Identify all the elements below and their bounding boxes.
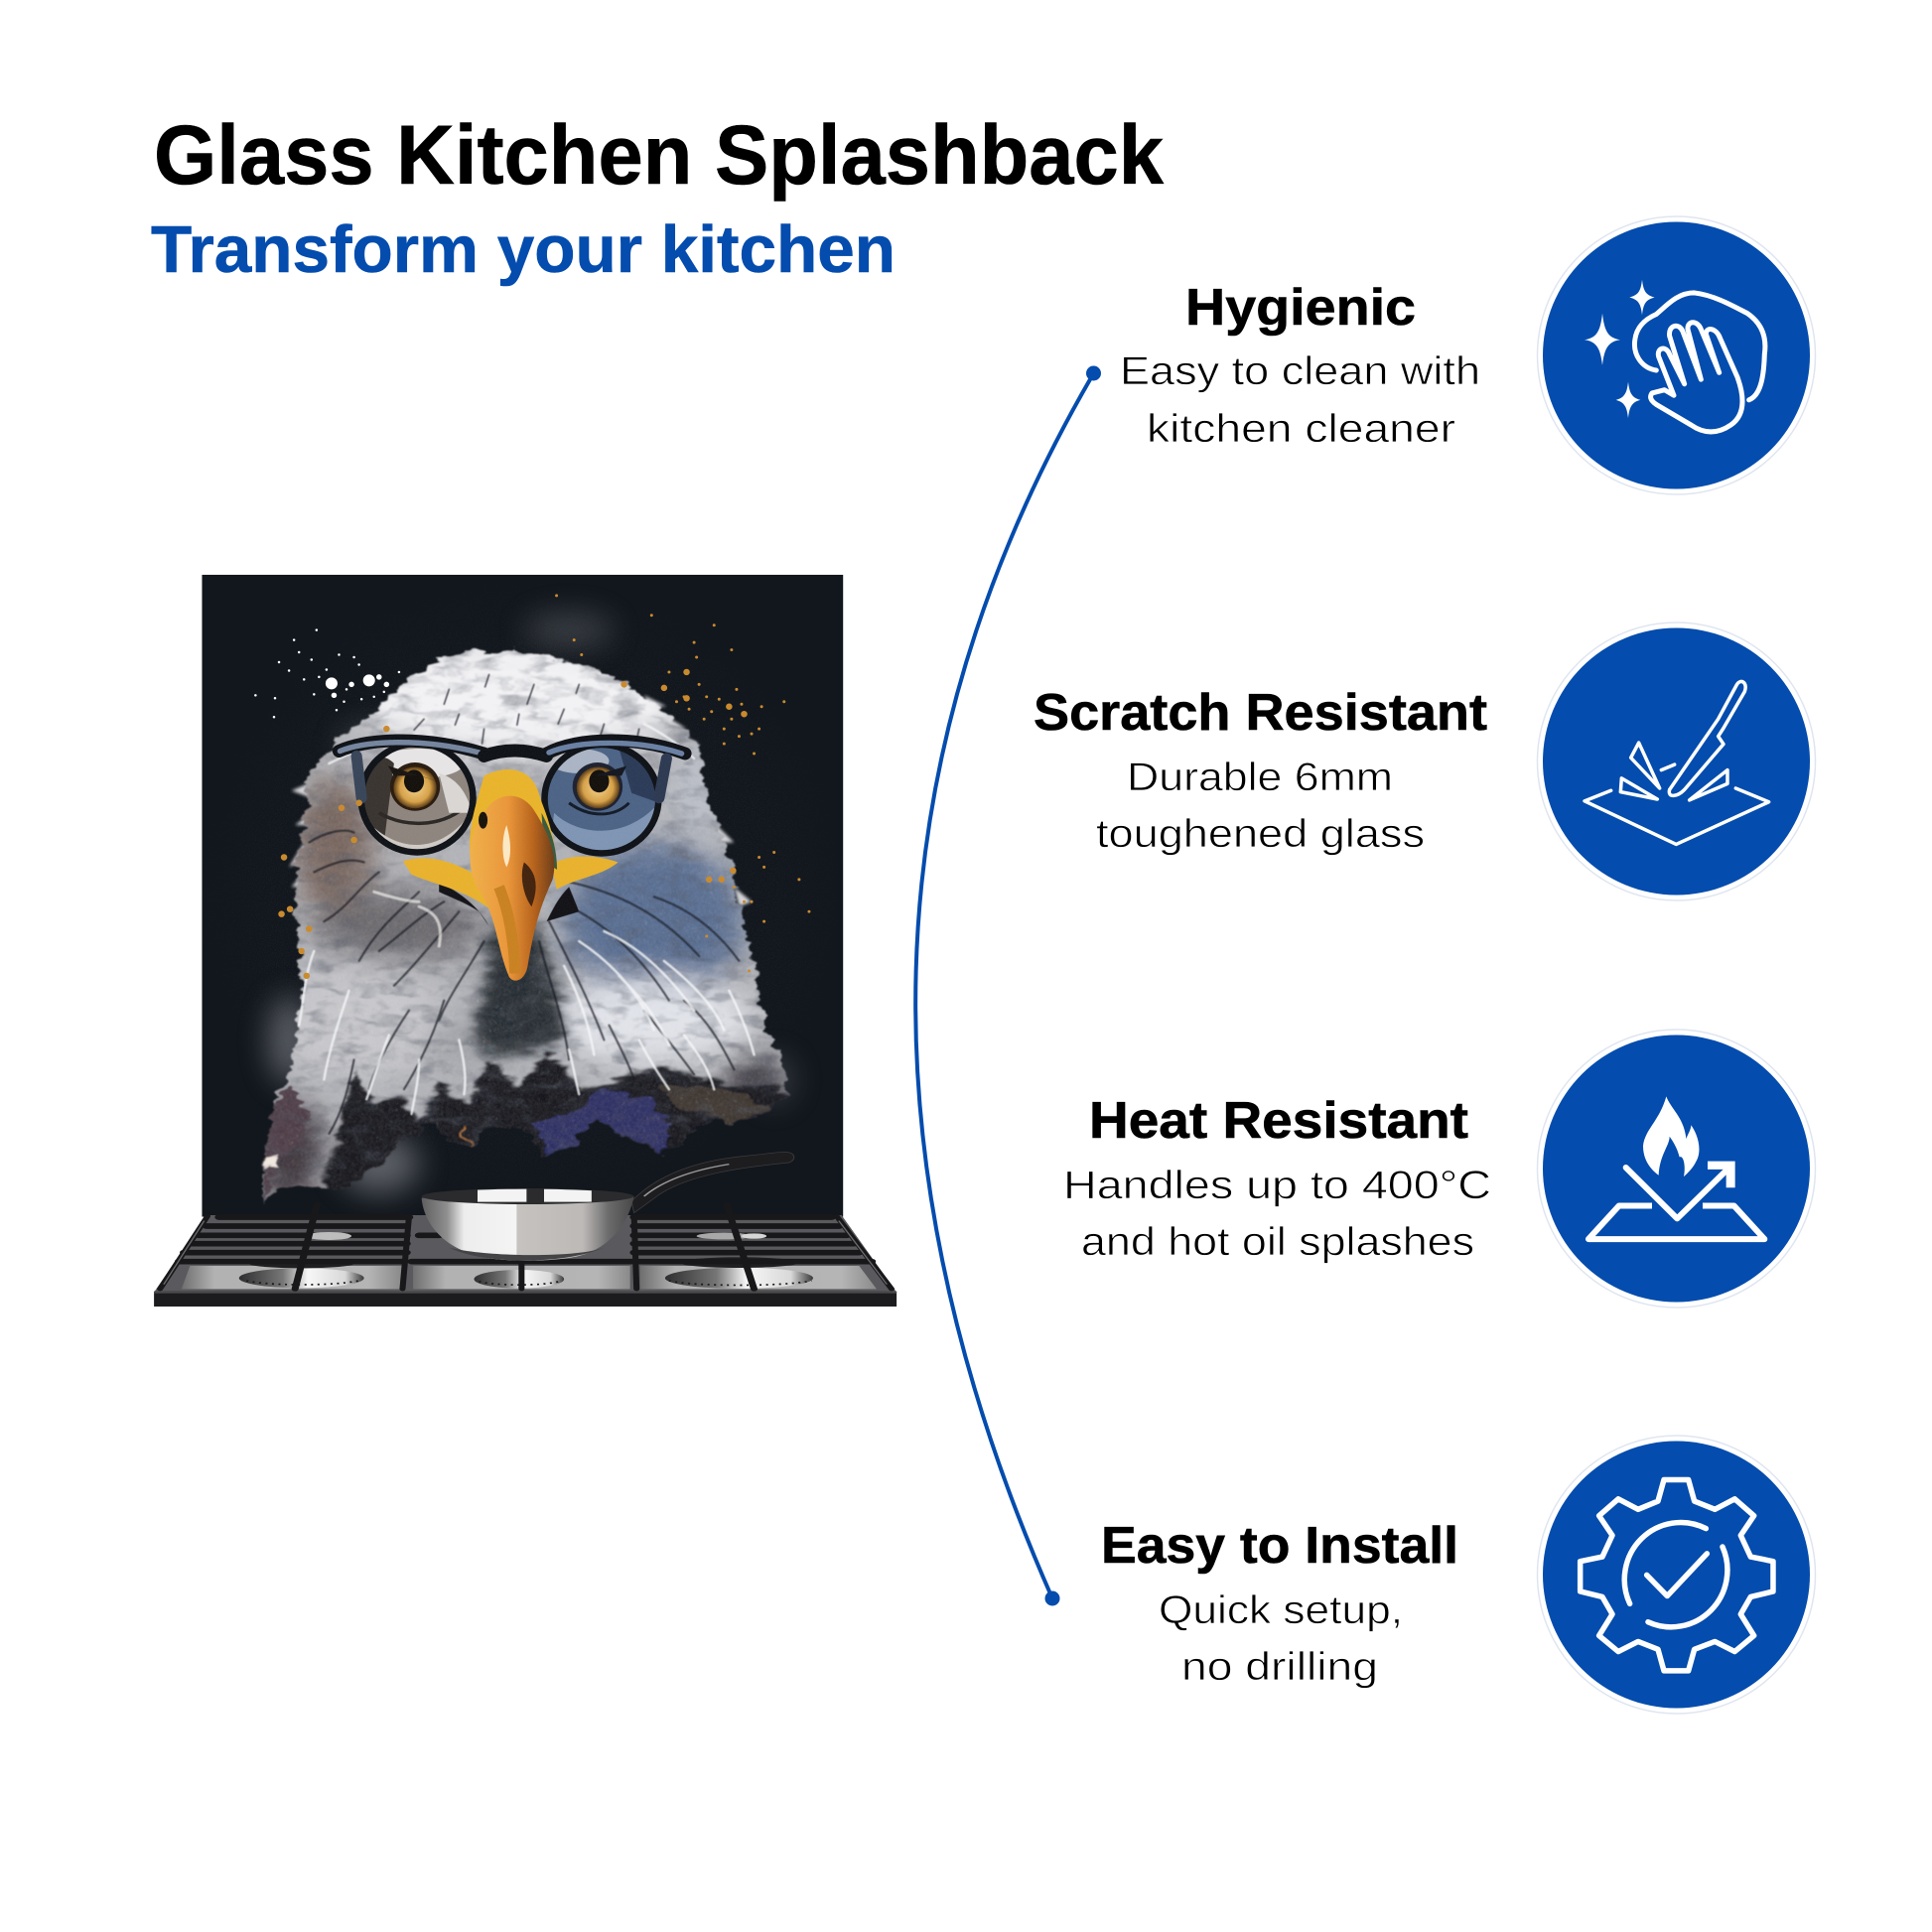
speckle grain bbox=[240, 616, 810, 1178]
burners bbox=[239, 1257, 813, 1289]
steel panels bbox=[182, 1266, 401, 1289]
cooktop with pan bbox=[154, 1152, 897, 1307]
splashback panel with eagle artwork bbox=[202, 575, 843, 1217]
icon: flame on glass with arrow bbox=[1537, 1030, 1815, 1308]
feather spikes around the head bbox=[289, 695, 757, 976]
paint splatter: white bbox=[255, 630, 399, 717]
feature: Heat Resistant: Handles up to 400°C bbox=[1063, 1164, 1491, 1207]
product illustration: splashback above cooktop bbox=[154, 575, 897, 1307]
subtitle: Transform your kitchen bbox=[151, 212, 896, 287]
feature: Hygienic bbox=[1120, 279, 1480, 451]
feature: Scratch Resistant: Scratch Resistant bbox=[1034, 684, 1487, 742]
feature: Easy to Install: no drilling bbox=[1181, 1645, 1378, 1689]
pan rim bbox=[422, 1188, 633, 1204]
left lens bbox=[364, 747, 471, 850]
right eye bbox=[569, 762, 626, 811]
title: Glass Kitchen Splashback bbox=[154, 108, 1164, 202]
eagle head bbox=[260, 645, 790, 1204]
hob base bbox=[154, 1215, 897, 1293]
left eye bbox=[388, 762, 444, 811]
feature: Heat Resistant bbox=[1063, 1092, 1491, 1264]
feature: Scratch Resistant: toughened glass bbox=[1096, 812, 1425, 856]
feature: Hygienic: Hygienic bbox=[1185, 279, 1416, 337]
dust haze bbox=[269, 613, 794, 1193]
connector curve with end dots bbox=[915, 365, 1101, 1606]
feature: Easy to Install bbox=[1101, 1517, 1458, 1689]
right lens bbox=[548, 748, 655, 850]
pan handle bbox=[631, 1152, 794, 1213]
grate bars bbox=[160, 1204, 892, 1289]
feature: Heat Resistant: Heat Resistant bbox=[1089, 1092, 1468, 1150]
glasses frames bbox=[339, 741, 685, 853]
beak bbox=[403, 769, 619, 981]
icon: knife scratching glass bbox=[1537, 622, 1815, 900]
feature: Easy to Install: Quick setup, bbox=[1159, 1588, 1403, 1632]
icon: cleaning hand with sparkles bbox=[1537, 216, 1815, 494]
paint splatter: orange bbox=[282, 596, 809, 976]
dark throat bbox=[474, 926, 569, 1059]
feature: Scratch Resistant bbox=[1034, 684, 1487, 856]
feature: Hygienic: kitchen cleaner bbox=[1147, 407, 1455, 451]
feather strokes bbox=[299, 674, 755, 1134]
feature: Easy to Install: Easy to Install bbox=[1101, 1517, 1458, 1575]
pan body bbox=[422, 1196, 634, 1261]
icon: gear with check mark bbox=[1537, 1436, 1815, 1714]
beak shadow and mouth bbox=[439, 882, 489, 926]
front edge bbox=[154, 1292, 897, 1307]
feature: Scratch Resistant: Durable 6mm bbox=[1127, 756, 1393, 799]
feature: Heat Resistant: and hot oil splashes bbox=[1081, 1220, 1474, 1264]
feature: Hygienic: Easy to clean with bbox=[1120, 349, 1480, 393]
dark lower feathers bbox=[319, 1052, 789, 1208]
